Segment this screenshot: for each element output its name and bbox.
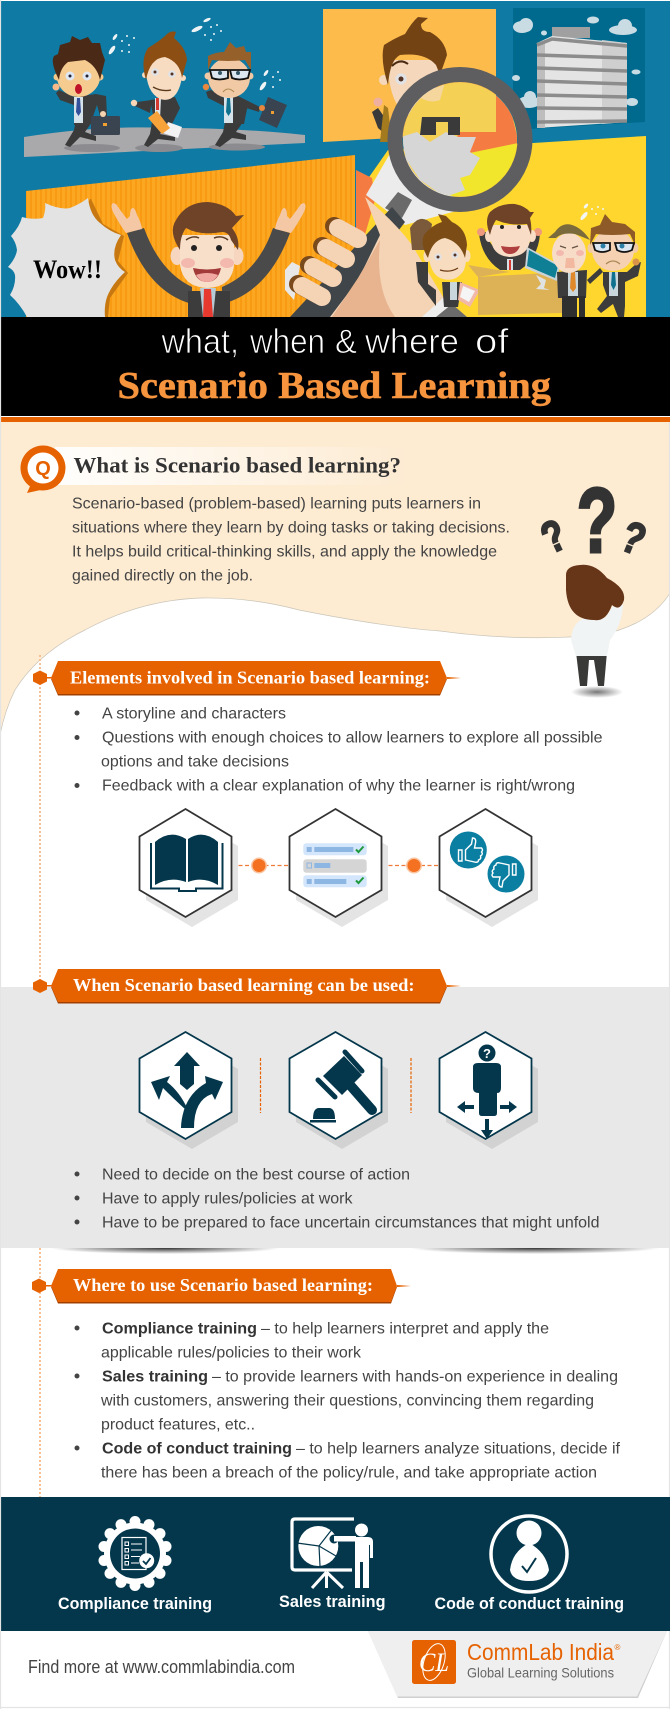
icon: checklist hexagon (290, 809, 388, 927)
icon: question marks: ? (577, 468, 617, 572)
icon: code of conduct (491, 1516, 567, 1592)
cardboard box (468, 265, 562, 315)
heading highlight (55, 447, 410, 485)
title line: what, when & where of: & (335, 323, 357, 361)
title line: what, when & where of: what, (161, 323, 239, 361)
list: when (74, 1166, 600, 1232)
logo mark: CL (419, 1648, 449, 1677)
hand holding magnifier (285, 192, 467, 317)
list: where: Compliance training (102, 1320, 257, 1338)
icon: book hexagon (140, 809, 238, 927)
paragraph: Scenario-based (problem-based) learning puts learners in (72, 496, 481, 512)
hero illustration (0, 1, 670, 317)
logo wordmark: CommLab India (467, 1639, 614, 1665)
panel: what is scenario based learning (0, 422, 670, 735)
panel: orange striped background (26, 155, 355, 317)
list: elements: options and take decisions (101, 754, 289, 770)
list: where: there has been a breach of the policy/rule, and take appropriate action (101, 1464, 597, 1482)
list: where: – to help learners analyze situations, decide if (296, 1440, 621, 1458)
list: where: with customers, answering their questions, convincing them regarding (100, 1392, 594, 1410)
heading: What is Scenario based learning? (74, 452, 401, 478)
panel: yellow background (360, 136, 646, 317)
icon: question marks: ? (534, 510, 574, 564)
title line: what, when & where of (161, 323, 509, 361)
icon: sales presentation (292, 1519, 373, 1588)
orange divider (0, 417, 670, 422)
label: code of conduct training: Code of conduct training (434, 1594, 624, 1613)
banner: when (33, 969, 461, 1004)
banner: elements: Elements involved in Scenario based learning: (70, 668, 430, 688)
man with clipboard (416, 214, 480, 307)
banner: when: When Scenario based learning can be used: (73, 975, 415, 995)
shadows below grey panel (50, 1242, 660, 1254)
callout: Wow burst (8, 198, 128, 317)
computer monitor (525, 247, 560, 290)
icon: compliance gear (98, 1516, 172, 1591)
paragraph: gained directly on the job. (72, 568, 253, 584)
list: where: – to provide learners with hands-on experience in dealing (212, 1368, 618, 1386)
icon: crossroads hexagon (140, 1032, 238, 1149)
list: where: product features, etc.. (101, 1416, 255, 1434)
icon: uncertain person hexagon (440, 1032, 538, 1149)
panel: grey background (0, 987, 670, 1248)
icon: sweat drops (579, 203, 604, 221)
character: man with folder (131, 32, 187, 147)
character: shocked man (52, 36, 120, 147)
man covering his face (548, 224, 590, 317)
footer link text: Find more at www.commlabindia.com (28, 1657, 295, 1677)
list: when: Have to be prepared to face uncertain circumstances that might unfold (102, 1214, 600, 1232)
divider (260, 1058, 411, 1113)
character: excited man (112, 202, 306, 317)
list: elements: Questions with enough choices to allow learners to explore all possible (102, 730, 603, 746)
title line: what, when & where of: when (249, 323, 325, 361)
title line: Scenario Based Learning: Scenario Based Learning (118, 365, 551, 407)
character: thinking man from behind (566, 565, 624, 698)
list: elements (74, 706, 603, 794)
list: elements: A storyline and characters (102, 706, 286, 722)
list: where: Code of conduct training (102, 1440, 292, 1458)
character: man with glasses (203, 42, 287, 147)
dotted timeline (39, 655, 41, 1498)
logo mark (412, 1640, 456, 1684)
banner: elements (33, 661, 461, 696)
icon: question marks (534, 468, 652, 572)
list: where: applicable rules/policies to their work (101, 1344, 362, 1362)
list: when: Need to decide on the best course of action (102, 1166, 410, 1184)
banner: where (32, 1269, 411, 1304)
banner: where: Where to use Scenario based learning: (73, 1275, 373, 1295)
icon: sweat drops (107, 17, 281, 91)
title line: what, when & where of: of (475, 323, 509, 361)
list: where: Sales training (102, 1368, 208, 1386)
logo plate: ® (614, 1643, 620, 1652)
icon: question marks: ? (614, 512, 652, 565)
icon: Q speech bubble: Q (35, 458, 51, 480)
magnifying glass (366, 74, 525, 225)
label: compliance training: Compliance training (58, 1594, 212, 1613)
icon: Q speech bubble (20, 446, 66, 493)
title band (0, 317, 670, 416)
logo plate (368, 1631, 667, 1698)
icon: feedback hexagon (440, 809, 538, 927)
man hidden behind hand (410, 219, 432, 250)
icon: gavel hexagon (290, 1032, 388, 1149)
logo tagline: Global Learning Solutions (467, 1664, 614, 1680)
panel: office building (512, 8, 645, 130)
panel: running office workers (24, 17, 305, 157)
paragraph: situations where they learn by doing tasks or taking decisions. (72, 520, 510, 536)
paragraph: It helps build critical-thinking skills, and apply the knowledge (72, 544, 497, 560)
panel: training types (1, 1497, 670, 1631)
callout: Wow burst: Wow!! (33, 255, 102, 284)
connectors (232, 858, 438, 874)
man behind box (477, 204, 542, 270)
icon: uncertain person hexagon: ? (483, 1046, 491, 1061)
character group: coworkers (410, 203, 641, 317)
title line: what, when & where of: where (364, 323, 459, 361)
list: where (74, 1320, 621, 1482)
paragraph (72, 496, 510, 584)
list: elements: Feedback with a clear explanation of why the learner is right/wrong (102, 778, 575, 794)
label: sales training: Sales training (279, 1592, 386, 1611)
list: where: – to help learners interpret and apply the (261, 1320, 549, 1338)
panel: orange with peering man (323, 9, 496, 142)
list: when: Have to apply rules/policies at work (102, 1190, 353, 1208)
man with glasses, right (587, 214, 641, 317)
